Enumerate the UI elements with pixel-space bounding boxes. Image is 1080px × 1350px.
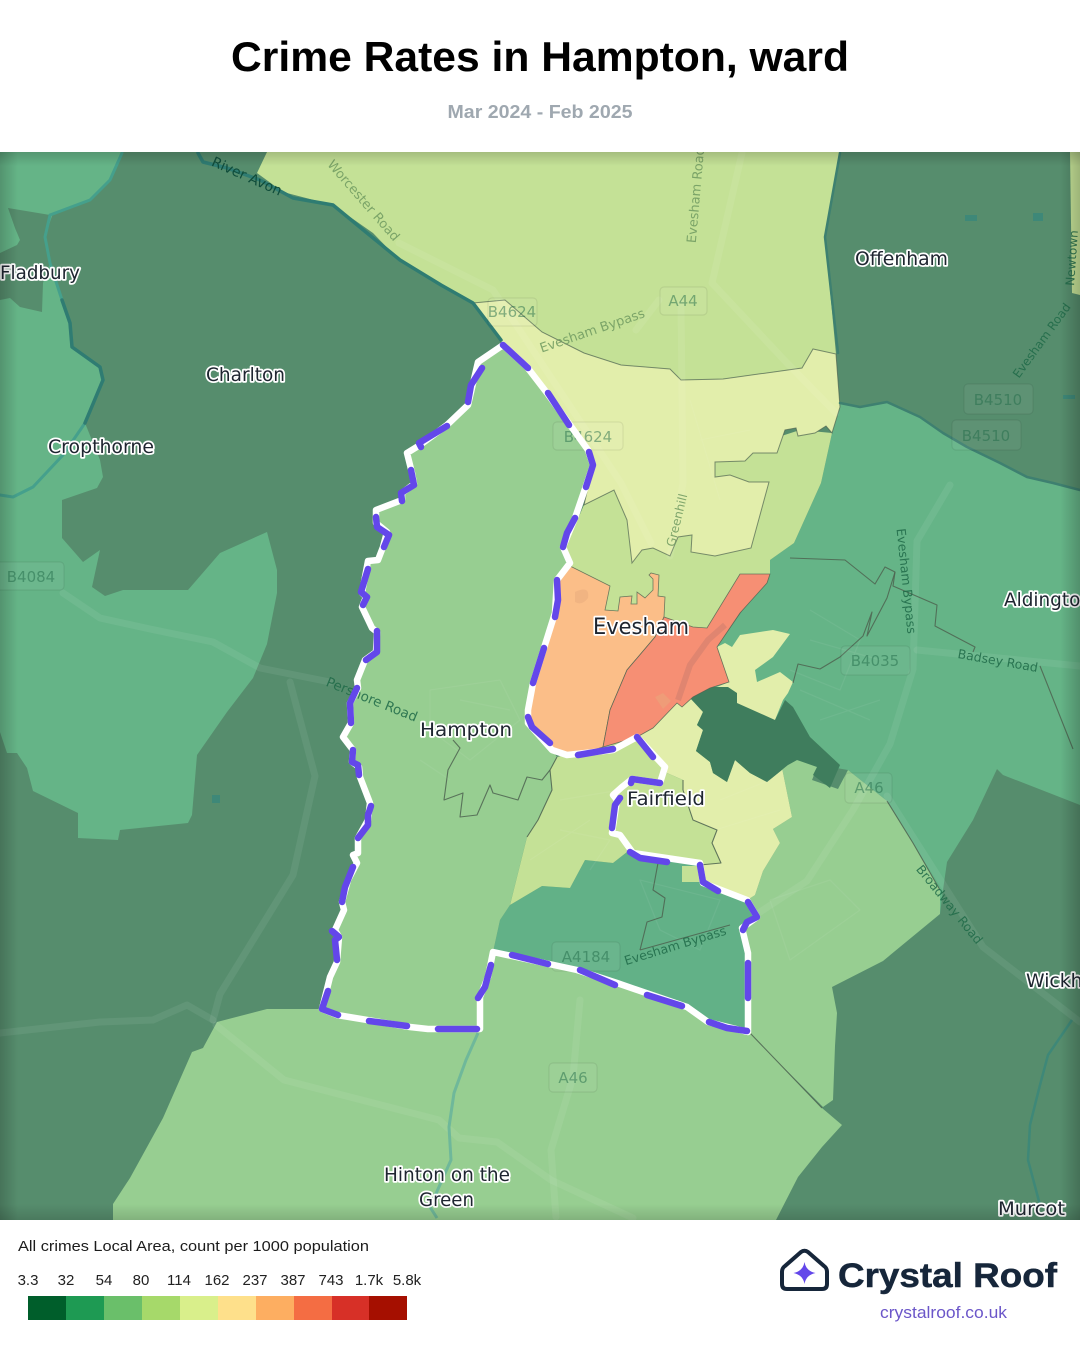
River Avon west dark reach: [62, 300, 103, 423]
choropleth map: [0, 147, 1080, 1220]
shield B4624 north: [488, 298, 537, 326]
shield B4624 north: B4624: [488, 303, 536, 321]
road inside town centre: [678, 625, 725, 700]
shield B4624 south: [553, 422, 623, 450]
place label: Cropthorne: Cropthorne: [48, 436, 154, 458]
shield A46 south: A46: [558, 1069, 588, 1087]
region: pale north of Fairfield: [702, 630, 793, 720]
subtitle: date range: Mar 2024 - Feb 2025: [448, 102, 632, 122]
place label: Hampton: Hampton: [420, 719, 512, 741]
road label: Evesham Road north-east: Evesham Road: [1010, 301, 1074, 381]
road label: Evesham Bypass south: Evesham Bypass: [622, 923, 728, 968]
place label: Hinton on the Green: Hinton on the: [384, 1164, 510, 1186]
region: south teal: [493, 852, 757, 1032]
shield B4035: B4035: [851, 652, 899, 670]
place label: Fladbury: Fladbury: [0, 262, 80, 284]
legend tick labels: 32: [58, 1272, 74, 1289]
road label: Evesham Bypass east: Evesham Bypass: [894, 528, 919, 634]
place label: Charlton: Charlton: [206, 364, 285, 386]
title: Crime Rates in Hampton, ward: [231, 33, 849, 80]
region: dark green low-crime area: [690, 687, 840, 788]
region: north pale: [473, 300, 840, 563]
stream east: [1028, 1020, 1072, 1205]
region: north yellow-green: [257, 152, 840, 380]
legend tick labels: 80: [133, 1272, 149, 1289]
shield B4084: B4084: [7, 568, 55, 586]
place label: Evesham: Evesham: [593, 615, 689, 640]
shield A4184: A4184: [562, 948, 610, 966]
region: south light green: [113, 952, 842, 1220]
legend tick labels: 1.7k: [355, 1272, 384, 1289]
shield A44: [660, 287, 707, 315]
road shields: [0, 287, 1033, 1092]
shield A46 east: [845, 773, 892, 803]
region: red-orange town centre: [603, 574, 770, 747]
place label: Fairfield: Fairfield: [627, 788, 705, 810]
place label: Hinton on the Green: [384, 1164, 510, 1211]
legend tick labels: 162: [204, 1272, 230, 1289]
place label: Murcot: Murcot: [998, 1198, 1065, 1220]
legend title: All crimes Local Area, count per 1000 population: [18, 1238, 369, 1255]
ward boundary white line: [322, 345, 757, 1032]
shield B4510 upper: [964, 384, 1033, 414]
place label: Hinton on the Green: Green: [419, 1189, 474, 1211]
legend tick labels: 5.8k: [393, 1272, 422, 1289]
legend tick labels: 3.3: [18, 1272, 38, 1289]
roads: [0, 300, 1080, 1186]
region: small yellow-green block: [682, 866, 701, 882]
map edge vignette: [0, 152, 1080, 1220]
road label: River Avon: River Avon: [209, 154, 284, 200]
shield B4084: [0, 562, 64, 590]
shield B4510 upper: B4510: [974, 391, 1022, 409]
legend tick labels: 387: [280, 1272, 306, 1289]
legend tick labels: 54: [96, 1272, 112, 1289]
shield A4184: [552, 942, 620, 971]
road label: Greenhill: Greenhill: [664, 492, 690, 548]
website: crystalroof.co.uk: [880, 1304, 1008, 1322]
shield A44: A44: [668, 292, 698, 310]
place label: Offenham: Offenham: [855, 248, 948, 270]
stream south: [430, 1033, 478, 1218]
icon: house outline: [782, 1251, 827, 1289]
region: central yellow-green: [560, 430, 832, 640]
River Avon west: [0, 153, 122, 497]
region: Fladbury dark patch: [0, 208, 50, 312]
shield A46 south: [549, 1063, 597, 1092]
legend tick labels: 114: [167, 1272, 191, 1289]
region: Fairfield yellow-green: [510, 737, 721, 905]
region: orange high-crime area: [528, 566, 665, 757]
shield B4510 lower: [952, 420, 1021, 450]
road label: Broadway Road: Broadway Road: [913, 862, 986, 947]
region: north-east strip: [1070, 152, 1080, 295]
ward and area outlines: [444, 558, 1073, 1108]
logo: Crystal Roof: [782, 1251, 1058, 1322]
legend colour bar: [28, 1296, 407, 1320]
wordmark: Crystal Roof: [838, 1257, 1058, 1295]
shield B4624 south: B4624: [564, 428, 612, 446]
road label: Pershore Road: Pershore Road: [324, 674, 420, 726]
buildings in orange area: [575, 590, 671, 709]
icon: purple four-point star: [794, 1262, 816, 1284]
region: Hampton ward light green: [322, 345, 593, 1029]
river edge east: [825, 153, 1080, 490]
legend tick labels: [18, 1272, 422, 1289]
road label: Evesham Road north: Evesham Road: [685, 147, 708, 244]
shield B4035: [841, 646, 910, 675]
River Avon north: [198, 153, 501, 340]
road label: Worcester Road: Worcester Road: [324, 157, 402, 244]
legend tick labels: 237: [242, 1272, 268, 1289]
road label: Evesham Bypass north: Evesham Bypass: [538, 306, 647, 356]
shield B4510 lower: B4510: [962, 427, 1010, 445]
region: east teal area: [700, 402, 1080, 914]
ponds: [212, 213, 1075, 803]
road label: Badsey Road: Badsey Road: [957, 646, 1039, 675]
shield A46 east: A46: [854, 779, 884, 797]
region: pale south-east of Evesham: [637, 697, 792, 900]
ward boundary purple dashes: [322, 345, 757, 1031]
legend tick labels: 743: [318, 1272, 344, 1289]
region: east light green: [740, 760, 940, 1107]
region: west teal area: [0, 152, 277, 840]
legend: [18, 1238, 422, 1320]
